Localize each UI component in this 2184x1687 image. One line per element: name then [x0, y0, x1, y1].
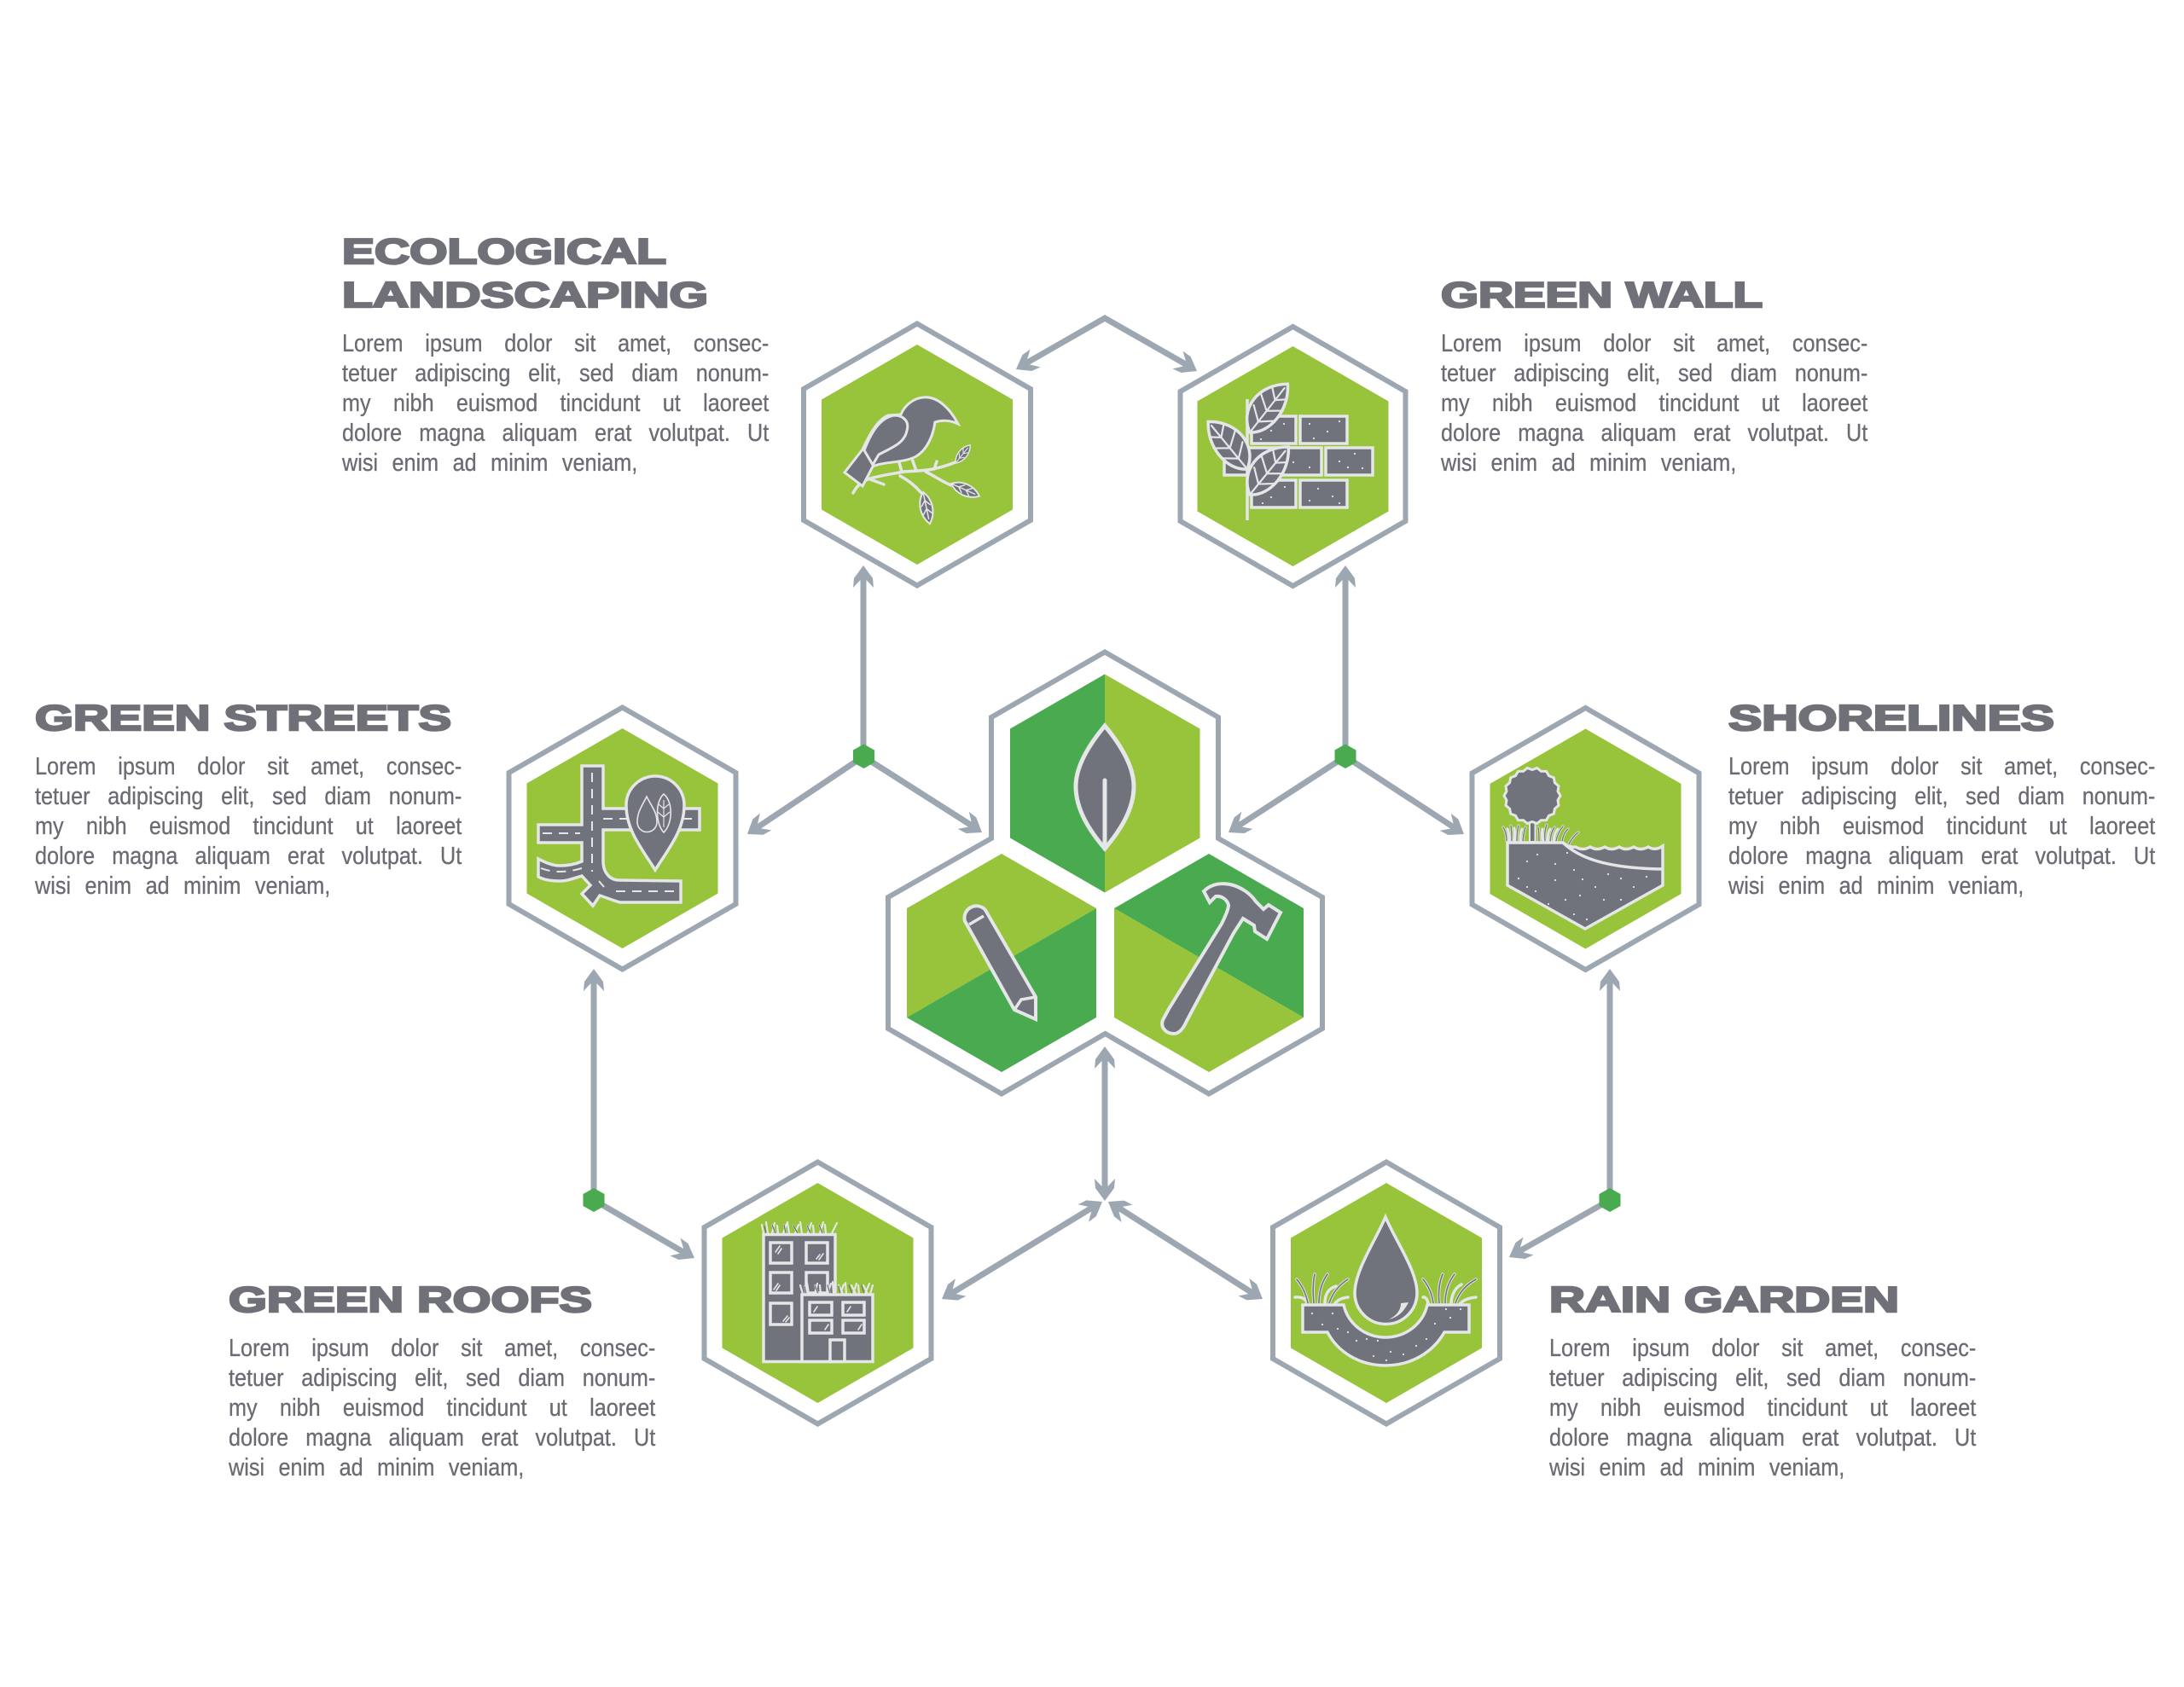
body text: Lorem ipsum dolor sit amet, consec- [1441, 330, 1867, 357]
icon: bird on branch [845, 397, 982, 525]
body text [1728, 753, 2155, 900]
cluster outline [888, 652, 1322, 1093]
icon: brick wall with climbing leaves [1199, 374, 1373, 520]
arrow: left upper node connectors [741, 565, 988, 843]
panel: shorelines hexagon [1472, 708, 1699, 970]
left hexagon with pencil [907, 854, 1096, 1072]
body text: my nibh euismod tincidunt ut laoreet [1549, 1394, 1976, 1422]
body text: dolore magna aliquam erat volutpat. Ut [341, 420, 769, 447]
icon: roads with map pin [538, 766, 700, 906]
body text: dolore magna aliquam erat volutpat. Ut [229, 1424, 655, 1452]
icon: tree on shoreline [1503, 768, 1663, 929]
panel: green roofs hexagon [705, 1162, 932, 1424]
body text: dolore magna aliquam erat volutpat. Ut [1549, 1424, 1976, 1452]
body text: wisi enim ad minim veniam, [1728, 872, 2024, 900]
text block: shorelines [1728, 698, 2155, 900]
heading: green wall: GREEN WALL [1441, 275, 1763, 315]
body text: my nibh euismod tincidunt ut laoreet [1728, 813, 2155, 840]
body text: dolore magna aliquam erat volutpat. Ut [35, 843, 462, 870]
panel: ecological landscaping hexagon [804, 324, 1031, 585]
body text: dolore magna aliquam erat volutpat. Ut [1441, 420, 1867, 447]
text block: green wall [1440, 275, 1868, 477]
body text: Lorem ipsum dolor sit amet, consec- [229, 1335, 655, 1362]
arrow: center to green roofs double arrow [937, 1193, 1107, 1307]
node: upper right [1334, 744, 1356, 768]
arrow: center vertical double arrow [1095, 1046, 1115, 1201]
heading: rain garden: RAIN GARDEN [1549, 1279, 1899, 1319]
node: lower left [584, 1188, 604, 1212]
body text: my nibh euismod tincidunt ut laoreet [35, 813, 462, 840]
arrow: lower right node connectors [1504, 969, 1620, 1266]
panel: green wall hexagon [1181, 327, 1406, 586]
node: lower right [1599, 1188, 1621, 1212]
icon: water drop over swale [1295, 1217, 1476, 1365]
heading: ecological landscaping: ECOLOGICAL [341, 231, 665, 271]
body text: tetuer adipiscing elit, sed diam nonum- [1441, 360, 1867, 387]
body text: my nibh euismod tincidunt ut laoreet [341, 390, 769, 417]
body text: wisi enim ad minim veniam, [341, 449, 637, 477]
body text: wisi enim ad minim veniam, [1441, 449, 1736, 477]
body text [229, 1335, 655, 1481]
heading: green roofs: GREEN ROOFS [229, 1279, 592, 1319]
body text: wisi enim ad minim veniam, [229, 1454, 524, 1481]
panel: rain garden hexagon [1273, 1162, 1500, 1424]
panel: green streets hexagon [508, 708, 735, 969]
body text: Lorem ipsum dolor sit amet, consec- [1549, 1335, 1976, 1362]
arrow: right upper node connectors [1223, 565, 1470, 843]
panel: central hexagon cluster [888, 652, 1322, 1093]
body text: wisi enim ad minim veniam, [1549, 1454, 1844, 1481]
heading: green streets: GREEN STREETS [35, 698, 451, 738]
body text: dolore magna aliquam erat volutpat. Ut [1728, 843, 2155, 870]
arrow: center to rain garden double arrow [1103, 1193, 1268, 1307]
body text: my nibh euismod tincidunt ut laoreet [1441, 390, 1867, 417]
body text [1440, 330, 1868, 477]
heading: shorelines: SHORELINES [1728, 698, 2054, 738]
body text [34, 753, 462, 900]
body text: tetuer adipiscing elit, sed diam nonum- [341, 360, 769, 387]
icon: buildings with roof grass [762, 1222, 873, 1361]
body text: Lorem ipsum dolor sit amet, consec- [1728, 753, 2155, 780]
text block: rain garden [1549, 1279, 1976, 1481]
body text: tetuer adipiscing elit, sed diam nonum- [35, 783, 462, 810]
body text: my nibh euismod tincidunt ut laoreet [229, 1394, 655, 1422]
arrow: lower left node connectors [584, 969, 700, 1267]
right hexagon with hammer [1114, 854, 1304, 1072]
body text: tetuer adipiscing elit, sed diam nonum- [229, 1365, 655, 1392]
body text: wisi enim ad minim veniam, [35, 872, 330, 900]
body text: tetuer adipiscing elit, sed diam nonum- [1549, 1365, 1976, 1392]
heading: ecological landscaping: LANDSCAPING [341, 275, 708, 315]
arrow: ecological landscaping to green wall chevron [1011, 318, 1202, 380]
body text: Lorem ipsum dolor sit amet, consec- [341, 330, 769, 357]
node: upper left [853, 744, 874, 768]
text block: green streets [34, 698, 462, 900]
heading: ecological landscaping [341, 231, 708, 315]
text block: green roofs [229, 1279, 655, 1481]
top hexagon with leaf [1010, 674, 1199, 892]
body text [341, 330, 770, 477]
text block: ecological landscaping [341, 231, 770, 477]
body text: tetuer adipiscing elit, sed diam nonum- [1728, 783, 2155, 810]
body text: Lorem ipsum dolor sit amet, consec- [35, 753, 462, 780]
body text [1549, 1335, 1976, 1481]
